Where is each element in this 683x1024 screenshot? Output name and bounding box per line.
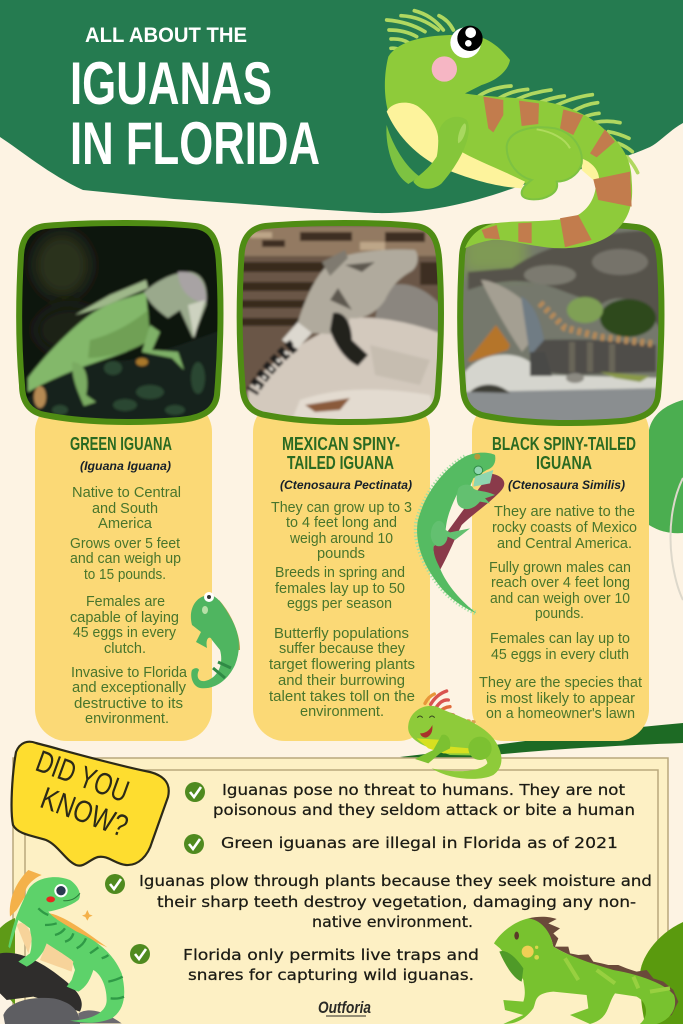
- icon: small green iguana on first panel: [191, 592, 240, 688]
- spines: [528, 917, 678, 1022]
- facts: 45 eggs in every cluth: [491, 647, 629, 663]
- facts: America: [98, 516, 153, 532]
- fact 3: their sharp teeth destroy vegetation, damaging any non-: [157, 893, 636, 911]
- crest: [425, 691, 477, 722]
- facts: target flowering plants: [269, 657, 415, 673]
- facts: and South: [92, 501, 158, 517]
- yellow panel: green iguana: [35, 400, 212, 741]
- icon: green iguana with maroon frill: [416, 453, 504, 613]
- icon: bottom right iguana: [494, 917, 678, 1024]
- did you know panel frame: [13, 758, 668, 1024]
- photo: green iguana: [15, 220, 225, 425]
- rock: [0, 953, 82, 1012]
- check icon: [184, 834, 204, 854]
- facts: and can weigh up: [70, 551, 181, 567]
- eye: [514, 932, 519, 940]
- scientific name: (Ctenosaura Pectinata): [280, 478, 412, 492]
- facts: Breeds in spring and: [275, 565, 405, 581]
- heading: TAILED IGUANA: [287, 453, 394, 473]
- icon: iguana on rock: [0, 870, 124, 1024]
- yellow panel: mexican spiny-tailed iguana: [253, 400, 430, 741]
- facts: and can weigh over 10: [490, 591, 630, 607]
- heading: IGUANA: [536, 453, 592, 473]
- stripes: [482, 97, 632, 247]
- body: [8, 877, 124, 1023]
- title: [70, 24, 320, 177]
- photo: mexican spiny-tailed iguana: [240, 220, 445, 425]
- panel text: mexican spiny-tailed iguana: [269, 434, 415, 720]
- maroon frill: [433, 473, 504, 570]
- check icon: [130, 944, 150, 964]
- eye: [450, 26, 483, 58]
- limbs: [457, 485, 495, 509]
- facts: on a homeowner's lawn: [486, 706, 635, 722]
- icon: large header iguana: [385, 11, 638, 248]
- cheek: [432, 56, 457, 82]
- facts: is most likely to appear: [486, 691, 635, 707]
- icon: laughing iguana: [408, 691, 501, 779]
- fact 4: Florida only permits live traps and: [183, 946, 479, 964]
- photo: black spiny-tailed iguana: [460, 220, 665, 427]
- check icon: [105, 874, 125, 894]
- heading: [282, 434, 400, 473]
- body: [385, 35, 632, 248]
- check icon: [185, 782, 205, 802]
- facts: talent takes toll on the: [269, 689, 415, 705]
- facts: rocky coasts of Mexico: [492, 520, 637, 536]
- throat: [473, 470, 493, 487]
- facts: to 15 pounds.: [84, 567, 166, 583]
- facts: and Central America.: [497, 536, 632, 552]
- heading: BLACK SPINY-TAILED: [492, 434, 636, 454]
- bubble text: DID YOU: [31, 743, 134, 809]
- bubble text: [20, 743, 144, 844]
- did you know bubble: [12, 742, 169, 866]
- yellow panel: black spiny-tailed iguana: [472, 400, 649, 741]
- title line one: IGUANAS: [70, 50, 272, 117]
- facts: suffer because they: [279, 641, 406, 657]
- facts: [70, 485, 188, 727]
- heading: GREEN IGUANA: [70, 434, 172, 454]
- facts: and their burrowing: [278, 673, 405, 689]
- far arm: [386, 125, 420, 184]
- dewlap: [499, 951, 523, 982]
- body: [417, 453, 495, 613]
- eye and cheek: [54, 884, 68, 897]
- facts: pounds: [317, 546, 365, 562]
- heading: MEXICAN SPINY-: [282, 434, 400, 454]
- title kicker: ALL ABOUT THE: [85, 24, 247, 47]
- chest: [417, 738, 470, 753]
- fact 1: poisonous and they seldom attack or bite a human: [213, 801, 635, 819]
- facts: Fully grown males can: [489, 560, 631, 576]
- panel text: green iguana: [70, 434, 188, 727]
- facts: 45 eggs in every: [73, 625, 177, 641]
- pale decorative curve: [670, 478, 683, 600]
- near arm: [413, 117, 469, 189]
- facts: They can grow up to 3: [271, 500, 412, 516]
- fact 3: native environment.: [312, 913, 473, 931]
- heading: [492, 434, 636, 473]
- fact 2: Green iguanas are illegal in Florida as of 2021: [221, 834, 618, 852]
- bubble text: KNOW?: [36, 780, 133, 844]
- facts: destructive to its: [74, 696, 183, 712]
- sparkle: [82, 910, 93, 921]
- chest: [17, 923, 32, 953]
- fact 3: [105, 872, 652, 931]
- facts: Females can lay up to: [490, 631, 630, 647]
- facts: reach over 4 feet long: [491, 575, 630, 591]
- limbs: [415, 735, 450, 763]
- spines: [416, 457, 477, 613]
- facts: Native to Central: [72, 485, 181, 501]
- scientific name: (Ctenosaura Similis): [508, 478, 625, 492]
- facts: to 4 feet long and: [286, 515, 397, 531]
- facts: weigh around 10: [289, 531, 393, 547]
- hind leg: [507, 127, 582, 199]
- fact 3: Iguanas plow through plants because they seek moisture and: [139, 872, 652, 890]
- facts: clutch.: [104, 641, 146, 657]
- facts: They are the species that: [479, 675, 642, 691]
- facts: Butterfly populations: [274, 626, 409, 642]
- stripes: [38, 908, 124, 999]
- facts: females lay up to 50: [275, 581, 405, 597]
- title line two: IN FLORIDA: [70, 110, 320, 177]
- dark green stripe: [400, 723, 683, 762]
- panel text: black spiny-tailed iguana: [479, 434, 642, 722]
- tail inner highlight: [582, 158, 599, 182]
- header green shape: [0, 0, 683, 213]
- facts: pounds.: [535, 606, 584, 622]
- facts: capable of laying: [70, 610, 179, 626]
- facts: They are native to the: [494, 504, 635, 520]
- cheek: [522, 946, 534, 958]
- eyes: [417, 716, 435, 718]
- facts: Grows over 5 feet: [70, 536, 180, 552]
- bottom right green shape: [640, 922, 683, 1024]
- facts: environment.: [85, 711, 169, 727]
- body: [408, 706, 501, 779]
- belly: [387, 103, 525, 188]
- crest and back spikes: [387, 11, 638, 173]
- crest: [10, 870, 42, 917]
- fact list: [105, 781, 652, 984]
- left green leaf: [0, 918, 15, 1005]
- facts: eggs per season: [287, 596, 392, 612]
- body: [494, 918, 675, 1024]
- green side blob: [649, 400, 683, 533]
- facts: Females are: [86, 594, 165, 610]
- scientific name: (Iguana Iguana): [80, 459, 171, 473]
- outforia logo: Outforia: [318, 998, 371, 1017]
- fact 1: [185, 781, 635, 819]
- fact 1: Iguanas pose no threat to humans. They are not: [222, 781, 625, 799]
- fact 4: snares for capturing wild iguanas.: [188, 966, 474, 984]
- facts: [479, 504, 642, 722]
- facts: [269, 500, 415, 720]
- mouth: [420, 725, 432, 738]
- fact 4: [130, 944, 479, 984]
- facts: environment.: [300, 704, 384, 720]
- markings: [565, 958, 670, 992]
- facts: Invasive to Florida: [71, 665, 188, 681]
- facts: and exceptionally: [72, 680, 187, 696]
